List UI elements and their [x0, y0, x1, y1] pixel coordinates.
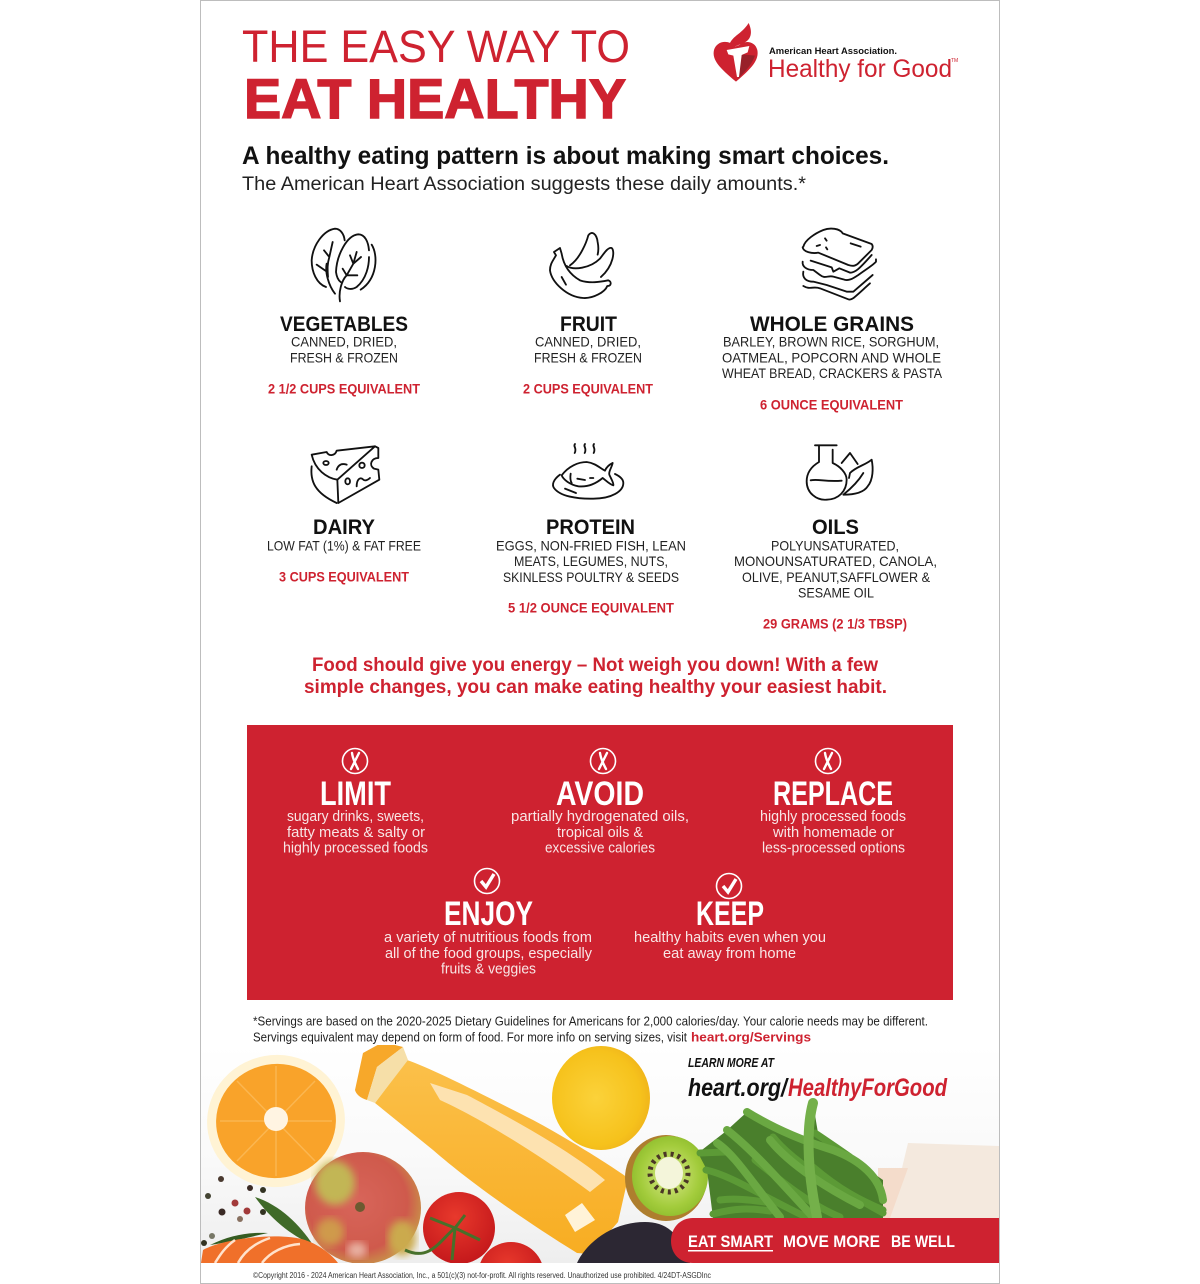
- tomatoes: [404, 1192, 542, 1263]
- panel: protein: EGGS, NON-FRIED FISH, LEAN: [496, 538, 686, 554]
- replace item: REPLACE: [773, 775, 893, 813]
- enjoy item: all of the food groups, especially: [385, 946, 593, 962]
- panel: oils: OILS: [812, 516, 859, 539]
- copyright: ©Copyright 2016 - 2024 American Heart Association, Inc., a 501(c)(3) not-for-profit. All rights reserved. Unauthorized use prohibited. 4/24DT-ASGDInc: [253, 1271, 711, 1280]
- enjoy item: ENJOY: [444, 895, 533, 933]
- panel: fruit: 2 CUPS EQUIVALENT: [523, 382, 654, 396]
- ribbon: eat smart move more be well: BE WELL: [891, 1232, 955, 1251]
- panel: fruit: CANNED, DRIED,: [535, 334, 641, 350]
- panel: fruit: FRESH & FROZEN: [534, 350, 642, 366]
- panel: dairy: 3 CUPS EQUIVALENT: [279, 570, 410, 584]
- icon: flask, drop and leaf: [807, 445, 873, 500]
- enjoy item: a variety of nutritious foods from: [384, 930, 592, 946]
- panel: dairy: DAIRY: [313, 516, 375, 539]
- replace item: highly processed foods: [760, 809, 906, 825]
- orange half: [207, 1054, 345, 1188]
- avoid item: [511, 748, 689, 856]
- title: THE EASY WAY TO: [242, 21, 630, 72]
- lemon: [552, 1046, 650, 1150]
- limit item: sugary drinks, sweets,: [287, 809, 424, 825]
- limit item: highly processed foods: [283, 840, 428, 856]
- panel: fruit: [523, 233, 654, 396]
- replace item: [760, 748, 906, 856]
- title: [242, 21, 630, 130]
- logo: American Heart Association Healthy for Good: TM: [951, 58, 958, 64]
- kiwi: [625, 1135, 708, 1221]
- panel: oils: MONOUNSATURATED, CANOLA,: [734, 553, 937, 569]
- panel: oils: [734, 445, 937, 632]
- green beans: [698, 1103, 883, 1218]
- panel: vegetables: VEGETABLES: [280, 313, 408, 336]
- keep item: KEEP: [696, 895, 764, 933]
- eggplant: [577, 1222, 690, 1263]
- avoid item: AVOID: [556, 775, 644, 813]
- panel: vegetables: 2 1/2 CUPS EQUIVALENT: [268, 382, 421, 396]
- logo: American Heart Association Healthy for Good: Healthy for Good: [768, 55, 952, 83]
- panel: oils: 29 GRAMS (2 1/3 TBSP): [763, 616, 907, 632]
- icon: bananas: [550, 233, 613, 298]
- avoid item: excessive calories: [545, 840, 655, 856]
- panel: red advice box: [247, 725, 953, 1000]
- footnote: [253, 1014, 928, 1044]
- panel: protein: [496, 444, 686, 616]
- keep item: healthy habits even when you: [634, 930, 826, 946]
- food photo: [201, 1045, 999, 1263]
- panel: fruit: FRUIT: [560, 313, 617, 336]
- ribbon: eat smart move more be well: [671, 1218, 999, 1263]
- panel: vegetables: FRESH & FROZEN: [290, 350, 398, 366]
- footnote: heart.org/Servings: [691, 1030, 811, 1044]
- subtitle heading: A healthy eating pattern is about making smart choices.: [242, 142, 889, 170]
- juice bottle: [355, 1042, 628, 1254]
- panel: whole grains: [722, 229, 943, 412]
- avoid item: tropical oils &: [557, 825, 643, 841]
- panel: vegetables: CANNED, DRIED,: [291, 334, 397, 350]
- enjoy item: fruits & veggies: [441, 962, 536, 978]
- panel: vegetables: [268, 229, 421, 396]
- panel: protein: 5 1/2 OUNCE EQUIVALENT: [508, 600, 675, 616]
- panel: whole grains: BARLEY, BROWN RICE, SORGHUM,: [723, 334, 939, 350]
- title: EAT HEALTHY: [244, 67, 626, 130]
- panel: whole grains: WHEAT BREAD, CRACKERS & PASTA: [722, 365, 943, 381]
- subtitle text: The American Heart Association suggests these daily amounts.*: [242, 174, 807, 195]
- icon: sliced bread: [803, 229, 876, 300]
- learn more link: [688, 1055, 948, 1102]
- avoid item: partially hydrogenated oils,: [511, 809, 689, 825]
- footnote: *Servings are based on the 2020-2025 Dietary Guidelines for Americans for 2,000 calories/day. Your calorie needs may be different.: [253, 1014, 928, 1028]
- footnote: Servings equivalent may depend on form of food. For more info on serving sizes, visit: [253, 1030, 687, 1044]
- learn more link: HealthyForGood: [788, 1074, 948, 1102]
- logo: American Heart Association Healthy for Good: [714, 23, 958, 83]
- limit item: fatty meats & salty or: [287, 825, 425, 841]
- learn more link: LEARN MORE AT: [688, 1055, 775, 1070]
- enjoy item: [384, 868, 593, 978]
- keep item: [634, 874, 826, 962]
- replace item: with homemade or: [772, 825, 894, 841]
- salmon: [201, 1236, 338, 1263]
- icon: cheese wedge: [311, 446, 379, 503]
- limit item: LIMIT: [320, 775, 391, 813]
- apple: [305, 1152, 421, 1264]
- callout: red message: simple changes, you can make eating healthy your easiest habit.: [304, 677, 887, 698]
- panel: oils: OLIVE, PEANUT,SAFFLOWER &: [742, 569, 931, 585]
- callout: red message: Food should give you energy – Not weigh you down! With a few: [312, 655, 878, 676]
- learn more link: heart.org/: [688, 1074, 790, 1102]
- panel: oils: POLYUNSATURATED,: [771, 538, 899, 554]
- replace item: less-processed options: [762, 840, 905, 856]
- ribbon: eat smart move more be well: EAT SMART: [688, 1232, 774, 1251]
- keep item: eat away from home: [663, 946, 796, 962]
- panel: whole grains: WHOLE GRAINS: [750, 313, 914, 336]
- icon: fish on a plate: [553, 444, 623, 499]
- panel: dairy: [267, 446, 421, 584]
- icon: heart and torch: [714, 23, 758, 82]
- paper bag: [878, 1143, 1000, 1218]
- panel: protein: PROTEIN: [546, 516, 635, 539]
- panel: protein: MEATS, LEGUMES, NUTS,: [514, 553, 668, 569]
- panel: oils: SESAME OIL: [798, 584, 874, 600]
- ribbon: eat smart move more be well: MOVE MORE: [783, 1232, 880, 1251]
- callout: red message: [304, 655, 887, 698]
- limit item: [283, 748, 428, 856]
- page frame: [200, 0, 1000, 1284]
- icon: leafy greens: [312, 229, 376, 301]
- peppercorns and herbs: [201, 1176, 313, 1246]
- panel: dairy: LOW FAT (1%) & FAT FREE: [267, 538, 421, 554]
- panel: protein: SKINLESS POULTRY & SEEDS: [503, 569, 679, 585]
- panel: whole grains: OATMEAL, POPCORN AND WHOLE: [722, 350, 941, 366]
- panel: whole grains: 6 OUNCE EQUIVALENT: [760, 398, 904, 412]
- logo: American Heart Association Healthy for Good: American Heart Association.: [769, 46, 897, 57]
